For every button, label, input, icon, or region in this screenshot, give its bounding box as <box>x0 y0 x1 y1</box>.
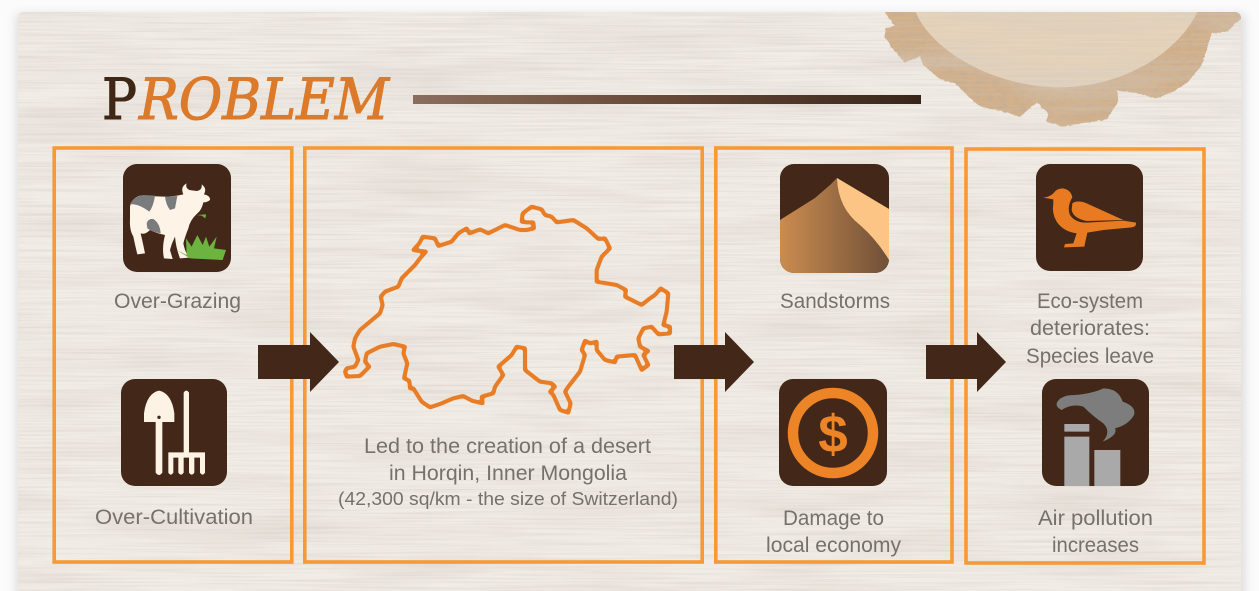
label: over-cultivation: Over-Cultivation <box>95 506 253 529</box>
icon: dollar coin <box>779 379 887 486</box>
label: eco-system deteriorates: Species leave <box>1026 345 1154 368</box>
arrow 1 <box>258 332 339 392</box>
label: over-grazing: Over-Grazing <box>114 290 241 313</box>
label: eco-system deteriorates: deteriorates: <box>1030 317 1150 340</box>
icon: dollar coin: $ <box>818 405 848 464</box>
label: air pollution increases: increases <box>1052 534 1139 557</box>
label: damage to local economy <box>766 507 902 557</box>
label: damage to local economy: local economy <box>766 534 902 557</box>
description: in Horqin, Inner Mongolia <box>389 462 627 485</box>
description <box>338 435 678 509</box>
icon: cow <box>123 164 231 272</box>
title rule <box>413 95 921 104</box>
arrow 3 <box>926 332 1006 392</box>
map: Switzerland outline <box>345 207 670 413</box>
title: P <box>102 67 137 133</box>
icon: sand dune <box>780 164 889 273</box>
label: damage to local economy: Damage to <box>783 507 884 530</box>
label: air pollution increases: Air pollution <box>1038 507 1153 530</box>
panel: causes <box>54 148 292 562</box>
icon: shovel and rake <box>121 379 227 486</box>
wood slice <box>883 10 1243 127</box>
label: air pollution increases <box>1038 507 1153 557</box>
label: sandstorms: Sandstorms <box>780 290 890 313</box>
description: Led to the creation of a desert <box>364 435 651 458</box>
arrow 2 <box>674 332 754 392</box>
label: eco-system deteriorates <box>1026 290 1154 368</box>
panel: economic effects <box>716 148 952 562</box>
description: (42,300 sq/km - the size of Switzerland) <box>338 489 678 509</box>
panel: environmental effects <box>966 149 1204 563</box>
title: ROBLEM <box>138 67 391 133</box>
icon: factory smoke <box>1042 379 1149 487</box>
icon: bird <box>1036 164 1143 271</box>
panel: desert <box>305 148 702 562</box>
label: eco-system deteriorates: Eco-system <box>1037 290 1143 313</box>
